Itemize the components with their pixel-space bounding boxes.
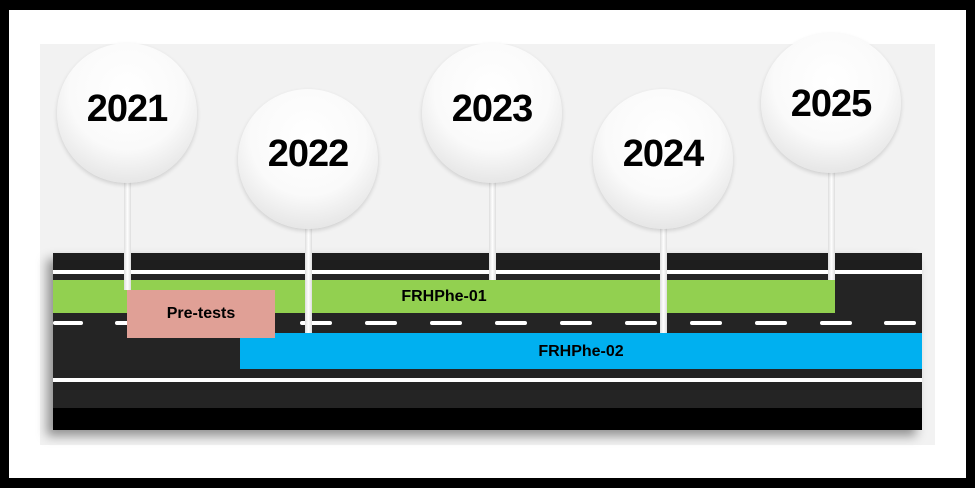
text: 2021 bbox=[87, 88, 167, 130]
text: 2022 bbox=[268, 133, 348, 175]
milestone 2023 bbox=[420, 44, 564, 186]
milestone 2025 bbox=[760, 44, 902, 176]
bar: FRHPhe-02: FRHPhe-02 bbox=[538, 343, 624, 360]
text: 2025 bbox=[791, 83, 871, 125]
background panel bbox=[40, 44, 935, 445]
bar: FRHPhe-01 bbox=[53, 280, 835, 313]
text: 2024 bbox=[623, 133, 703, 175]
bar: FRHPhe-01: FRHPhe-01 bbox=[401, 288, 487, 305]
milestone 2022 bbox=[236, 89, 380, 232]
text: 2023 bbox=[452, 88, 532, 130]
stems bbox=[124, 172, 835, 333]
lane dashes bbox=[53, 321, 916, 325]
milestone 2024 bbox=[592, 89, 734, 232]
bar: Pre-tests: Pre-tests bbox=[167, 305, 235, 322]
bar: FRHPhe-02 bbox=[240, 333, 922, 369]
milestone 2021 bbox=[56, 44, 198, 186]
road bbox=[53, 253, 922, 430]
bar: Pre-tests bbox=[127, 290, 275, 338]
